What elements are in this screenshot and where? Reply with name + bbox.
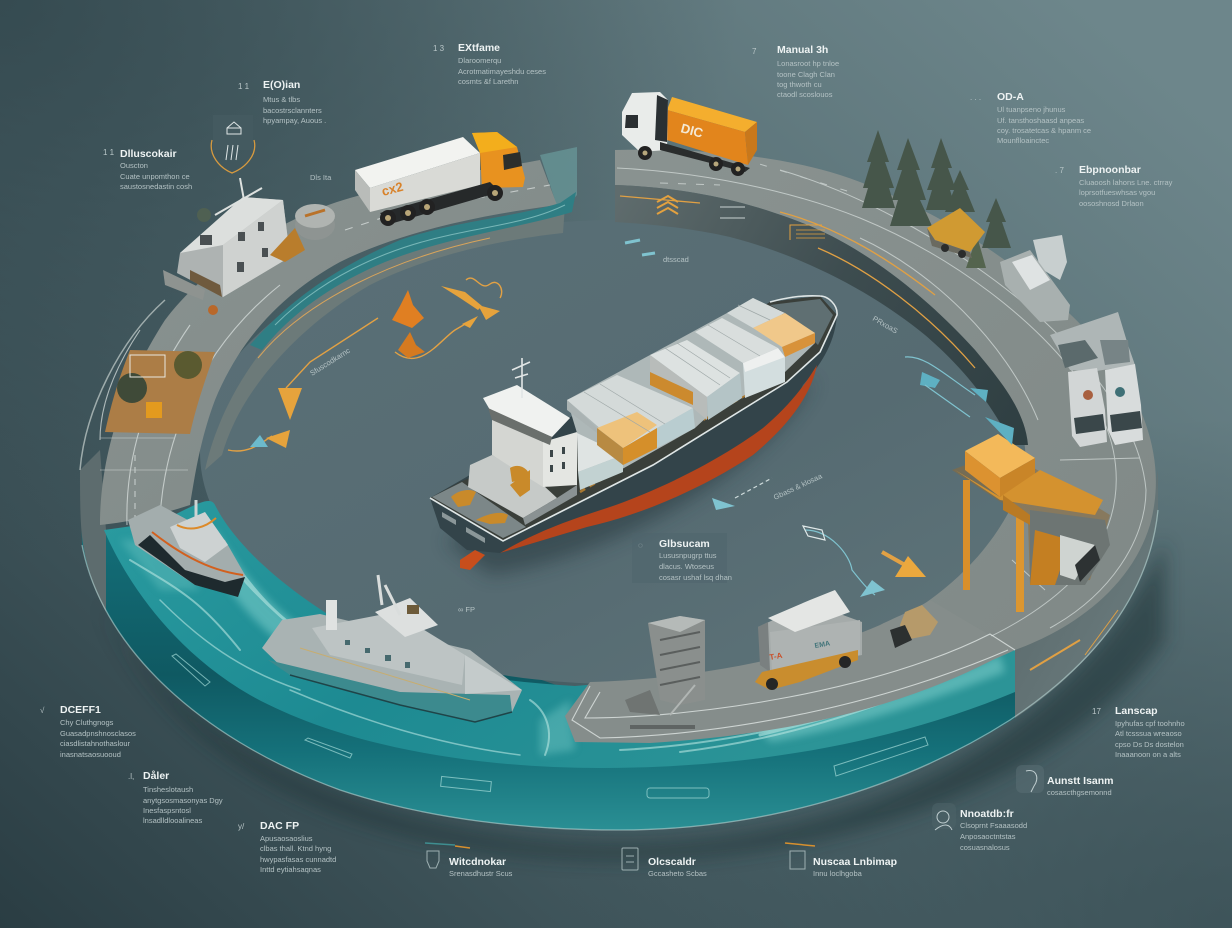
stern deck — [432, 482, 526, 538]
blurred foam patches — [120, 530, 1005, 755]
grey wall right side — [1015, 470, 1158, 718]
text block 2: bacostrsclannters — [263, 106, 322, 115]
deck house — [468, 455, 557, 518]
orange cone two — [398, 332, 425, 358]
round tank — [295, 210, 335, 240]
yellow loader — [927, 208, 985, 258]
inner wall, upper right — [615, 185, 1028, 445]
ferry cabin — [312, 612, 465, 685]
arch openings — [580, 372, 785, 492]
text block 10: Apusaosaoslius — [260, 834, 313, 843]
text block 8: √ — [40, 706, 45, 715]
container base — [567, 298, 815, 488]
text block 6: Cluaoosh lahons Lne. ctrray — [1079, 178, 1173, 187]
stern panels — [442, 512, 485, 543]
teal water streak — [250, 192, 576, 350]
interior blue arrows — [250, 240, 1014, 597]
arrow pair — [441, 286, 482, 310]
deck base — [430, 296, 837, 541]
text block 4: tog thwoth cu — [777, 80, 822, 89]
van left — [1068, 368, 1107, 447]
text block 5: Uf. tansthoshaasd anpeas — [997, 116, 1084, 125]
text block 2: hpyampay, Auous . — [263, 116, 326, 125]
left road markings — [100, 185, 550, 525]
small machinery — [890, 605, 938, 648]
text block 5: coy. trosatetcas & hpanm ce — [997, 126, 1091, 135]
container stack 4 — [695, 318, 785, 398]
text block 11: Srenasdhustr Scus — [449, 869, 513, 878]
text block 1: 1 3 — [433, 44, 445, 53]
text block 6: Ebpnoonbar — [1079, 164, 1141, 176]
text block 14: Atl tcsssua wreaoso — [1115, 729, 1182, 738]
text block 14: Ipyhufas cpf toohnho — [1115, 719, 1185, 728]
text block 9: .l, — [128, 772, 134, 781]
water surface — [104, 501, 1015, 768]
text block 8: DCEFF1 — [60, 704, 101, 716]
curved route — [395, 320, 472, 358]
small map label route: Sfuscodkarnc — [308, 346, 352, 378]
text block 16: Nnoatdb:fr — [960, 808, 1014, 820]
container machine: T-A — [769, 651, 783, 662]
text block 16 — [932, 803, 1027, 852]
text block 10: clbas thall. Ktnd hyng — [260, 844, 331, 853]
text block 13: Nuscaa Lnbimap — [813, 856, 897, 868]
text block 14 — [1092, 705, 1185, 759]
text block 9: Inesfaspsntosl — [143, 806, 191, 815]
text block 5: OD-A — [997, 91, 1024, 103]
water foam — [130, 520, 1000, 755]
container machine — [755, 590, 862, 690]
text block 15: Aunstt Isanm — [1047, 775, 1114, 787]
text block 13 — [785, 843, 897, 878]
small map label right: PRxoaS — [871, 314, 899, 335]
orange cone — [392, 290, 424, 328]
white rail — [430, 296, 837, 541]
crane gear — [510, 466, 530, 497]
container stack 3 — [650, 340, 742, 420]
route arrow left — [286, 318, 378, 388]
pin icon: house — [211, 115, 255, 173]
text block 14: Inaaanoon on a alts — [1115, 750, 1181, 759]
grey wall left side — [80, 450, 106, 612]
container stack 5 and 6 — [727, 298, 815, 357]
text block 1: EXtfame — [458, 42, 500, 54]
orange streak — [258, 238, 490, 358]
rudder — [460, 550, 485, 570]
text block 2: Mtus & tlbs — [263, 95, 300, 104]
pier outlines — [572, 634, 1015, 738]
text block 8: Chy Cluthgnogs — [60, 718, 114, 727]
orange pad left — [105, 350, 215, 434]
text block 10: Inttd eytiahsaqnas — [260, 865, 321, 874]
text block 16: cosuasnalosus — [960, 843, 1010, 852]
text block 3: Dlluscokair — [120, 148, 177, 160]
outer glass body and front wall — [80, 470, 1015, 830]
text block 10: DAC FP — [260, 820, 299, 832]
text block 12: Gccasheto Scbas — [648, 869, 707, 878]
superstructure — [492, 418, 543, 487]
central cargo ship — [430, 296, 837, 575]
text block 1: cosmts &f Larethn — [458, 77, 518, 86]
text block 6: . 7 — [1055, 166, 1064, 175]
scaffold tower — [625, 616, 705, 727]
text block 14: Lanscap — [1115, 705, 1158, 717]
text block 1: Acrotmatimayeshdu ceses — [458, 67, 546, 76]
text block 10: hwypasfasas cunnadtd — [260, 855, 336, 864]
text block 8: Guasadpnshnosclasos — [60, 729, 136, 738]
text block 10 — [238, 820, 336, 874]
text block 2 — [238, 79, 326, 125]
text block 4: 7 — [752, 47, 757, 56]
text block 9: Tinsheslotaush — [143, 785, 193, 794]
text block 3: 1 1 — [103, 148, 115, 157]
truck: orange container, white cab — [622, 92, 757, 176]
text block 9: anytgsosmasonyas Dgy — [143, 796, 223, 805]
text block 3: Ouscton — [120, 161, 148, 170]
road markings right — [617, 158, 1146, 650]
text block 3: Cuate unpomthon ce — [120, 172, 190, 181]
small map label ship: Gbass & klosaa — [772, 471, 824, 502]
trees — [862, 130, 1011, 268]
text block 5: Ul tuanpseno jhunus — [997, 105, 1066, 114]
text block 6: loprsotfueswhsas vgou — [1079, 188, 1155, 197]
text block 9: lnsadlldlooalineas — [143, 816, 202, 825]
text block 7: cosasr ushaf lsq dhan — [659, 573, 732, 582]
ring shadow — [100, 540, 1165, 860]
text block 1: Dlaroomerqu — [458, 56, 501, 65]
text block 9 — [128, 770, 223, 825]
red underside — [500, 365, 817, 553]
ring platform — [80, 147, 1165, 860]
ferry teal band — [268, 660, 512, 722]
container stack 2 — [567, 375, 695, 465]
deck gear — [451, 490, 508, 524]
text block 7: Glbsucam — [659, 538, 710, 550]
wall icons — [657, 196, 825, 240]
orange lines on wall — [620, 196, 1118, 670]
text block 12 — [622, 848, 707, 878]
left road section — [100, 160, 557, 525]
text block 7: ◌ — [638, 541, 643, 550]
text block 5: . . . — [970, 93, 981, 102]
text block 3: saustosnedastin cosh — [120, 182, 192, 191]
truck: white trailer, orange cab: cx2 — [380, 179, 405, 199]
text block 10: y/ — [238, 822, 245, 831]
vehicles on right road — [1000, 235, 1143, 447]
small road label: Dls Ita — [310, 173, 332, 182]
front wall outlines — [172, 654, 928, 798]
small map label top: dtsscad — [663, 255, 689, 264]
container machine: EMA — [814, 640, 831, 650]
text block 4: Manual 3h — [777, 44, 828, 56]
text block 8 — [40, 704, 136, 759]
text block 4: Lonasroot hp tnloe — [777, 59, 839, 68]
inner band, upper left — [205, 205, 565, 470]
ship shadow — [445, 380, 815, 575]
text block 5 — [970, 91, 1091, 145]
foam on streak — [275, 205, 565, 325]
text block 6: oososhnosd Drlaon — [1079, 199, 1144, 208]
small map label ferry: ∞ FP — [458, 605, 475, 614]
text block 15: cosascthgsemonnd — [1047, 788, 1112, 797]
text block 16: Anposaoctntstas — [960, 832, 1016, 841]
text block 5: Mounflloainctec — [997, 136, 1049, 145]
ferry upper house — [375, 598, 438, 637]
right road section — [565, 150, 1156, 742]
text block 13: Innu loclhgoba — [813, 869, 863, 878]
building station — [163, 178, 335, 315]
windows — [550, 447, 565, 472]
text block 11: Witcdnokar — [449, 856, 506, 868]
text block 2: E(O)ian — [263, 79, 300, 91]
ferry boat — [262, 575, 522, 722]
pier — [565, 600, 1015, 743]
text block 4: ctaodl scoslouos — [777, 90, 833, 99]
container ribs — [584, 305, 770, 432]
interior floor — [200, 220, 1036, 684]
text block 4 — [752, 44, 839, 99]
text block 14: 17 — [1092, 707, 1101, 716]
gantry crane — [952, 434, 1110, 612]
outer ring highlight — [82, 510, 1158, 830]
glass end panel — [540, 147, 577, 215]
text block 6 — [1055, 164, 1173, 208]
small boat — [128, 500, 245, 597]
text block 7 — [632, 533, 732, 583]
van right — [1105, 364, 1143, 445]
text block 15 — [1016, 765, 1114, 797]
mast — [512, 358, 530, 398]
left ring edge — [80, 300, 165, 470]
text block 2: 1 1 — [238, 82, 250, 91]
text block 12: Olcscaldr — [648, 856, 696, 868]
text block 7: Lususnpugrp ttus — [659, 551, 717, 560]
text block 8: ciasdlistahnothaslour — [60, 739, 131, 748]
bow deck — [770, 299, 833, 345]
text block 16: Clsoprnt Fsaaasodd — [960, 821, 1027, 830]
truck: white trailer, orange cab — [355, 132, 525, 226]
route arrow bottom left — [228, 436, 272, 451]
ferry waterline — [290, 675, 512, 722]
text block 9: Dåler — [143, 770, 169, 782]
left orange pad trees — [117, 351, 202, 418]
interior orange arrows — [228, 278, 926, 577]
text block 7: dlacus. Wtoseus — [659, 562, 714, 571]
truck: orange container, white cab: DIC — [679, 120, 705, 141]
text block 3 — [103, 148, 192, 191]
text block 4: toone Clagh Clan — [777, 70, 835, 79]
hull — [430, 296, 837, 553]
text block 14: cpso Ds Ds dostelon — [1115, 740, 1184, 749]
text block 11 — [425, 843, 513, 878]
ferry bow deck — [465, 655, 522, 694]
text block 8: inasnatsaosuooud — [60, 750, 121, 759]
container stack 1 — [577, 433, 623, 490]
text block 1 — [433, 42, 546, 86]
orange arrow lower right — [882, 552, 905, 565]
ferry hull — [262, 614, 522, 722]
